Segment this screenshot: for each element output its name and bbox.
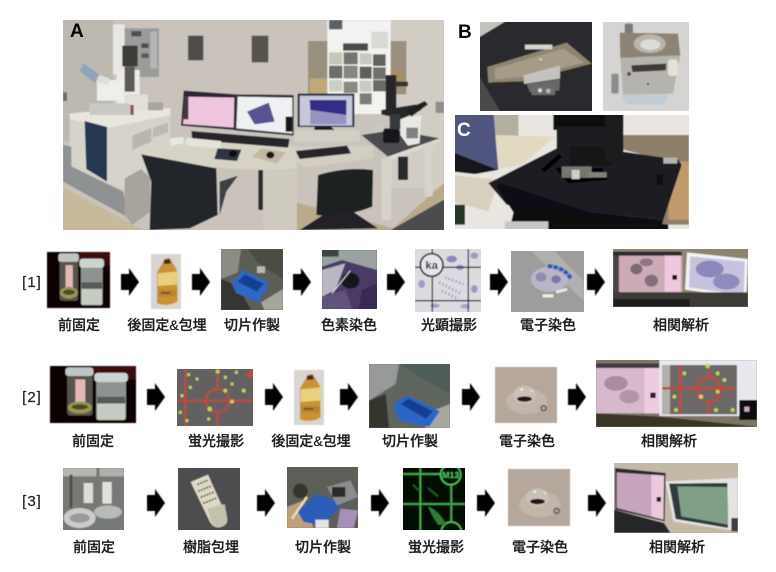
arrow — [265, 383, 283, 411]
step: 相関解析 — [611, 460, 741, 555]
monitor 3 — [298, 94, 354, 127]
step: 後固定&包埋 — [271, 370, 351, 449]
arrow — [490, 268, 508, 296]
row label [1]: [1] — [22, 274, 42, 291]
step: 相関解析: 相関解析 — [649, 539, 705, 555]
step: 電子染色: 電子染色 — [520, 317, 576, 333]
chairs — [141, 154, 218, 230]
step: 色素染色 — [319, 247, 380, 333]
step: 切片作製: 切片作製 — [382, 433, 438, 449]
poster — [327, 20, 391, 114]
arrow — [147, 383, 165, 411]
step: 電子染色 — [495, 367, 557, 449]
row 3 workflow — [22, 460, 741, 555]
photo: slide holder — [480, 22, 592, 111]
row 2 workflow — [22, 357, 760, 449]
step: 切片作製: 切片作製 — [224, 317, 280, 333]
step: 蛍光撮影: 蛍光撮影 — [188, 433, 244, 449]
step: 光顕撮影: 光顕撮影 — [421, 317, 477, 333]
step: 切片作製 — [218, 246, 286, 333]
step: 前固定 — [47, 252, 110, 333]
step: 電子染色: 電子染色 — [512, 539, 568, 555]
arrow — [568, 383, 586, 411]
photo: CLEM workstation room — [63, 20, 444, 230]
label B: B — [458, 22, 472, 43]
row label [2]: [2] — [22, 389, 42, 406]
label C: C — [457, 120, 471, 141]
arrow — [340, 383, 358, 411]
step: 光顕撮影 — [412, 246, 484, 333]
arrow — [293, 268, 311, 296]
step: 切片作製: 切片作製 — [295, 539, 351, 555]
step: 前固定 — [60, 465, 127, 555]
step: 切片作製 — [366, 361, 453, 449]
step: 相関解析 — [593, 357, 760, 449]
arrow — [121, 268, 139, 296]
step: 蛍光撮影 — [174, 366, 256, 449]
step: 色素染色: 色素染色 — [321, 317, 377, 333]
SEM column — [113, 24, 125, 74]
step: 後固定&包埋: 後固定&包埋 — [127, 317, 207, 333]
arrow — [147, 489, 165, 517]
step: 蛍光撮影: 蛍光撮影 — [408, 539, 464, 555]
arrow — [477, 489, 495, 517]
row 1 workflow — [22, 246, 751, 333]
arrow — [192, 268, 210, 296]
step: 前固定: 前固定 — [72, 433, 114, 449]
photo: grid holder — [603, 22, 689, 111]
step: 相関解析 — [610, 246, 751, 333]
arrow — [588, 489, 606, 517]
row label [3]: [3] — [22, 493, 42, 510]
arrow — [387, 268, 405, 296]
step: 切片作製 — [284, 464, 361, 555]
step: 電子染色: 電子染色 — [499, 433, 555, 449]
step: 相関解析: 相関解析 — [641, 433, 697, 449]
step: 蛍光撮影 — [400, 465, 468, 555]
photo: stage — [455, 115, 689, 229]
step: 後固定&包埋: 後固定&包埋 — [271, 433, 351, 449]
arrow — [462, 383, 480, 411]
step: 後固定&包埋 — [127, 254, 207, 333]
step: 電子染色 — [508, 469, 570, 555]
panel C: holder on microscope stage — [452, 112, 692, 235]
step: 樹脂包埋 — [175, 465, 243, 555]
step: 前固定: 前固定 — [58, 317, 100, 333]
step: 前固定 — [50, 366, 136, 449]
arrow — [257, 489, 275, 517]
wall prints — [188, 36, 203, 60]
monitor 1 — [181, 91, 236, 130]
label A: A — [70, 21, 84, 42]
step: 電子染色 — [508, 248, 587, 333]
step: 前固定: 前固定 — [73, 539, 115, 555]
shelf — [308, 41, 406, 94]
arrow — [587, 268, 605, 296]
SEM console — [70, 109, 170, 190]
arrow — [371, 489, 389, 517]
right table — [361, 130, 440, 157]
inverted microscope — [400, 115, 421, 146]
panel A: microscope room photo — [53, 8, 460, 242]
step: 相関解析: 相関解析 — [653, 317, 709, 333]
step: 蛍光撮影: M13 — [442, 470, 459, 480]
monitor 2 — [235, 94, 294, 136]
step: 樹脂包埋: 樹脂包埋 — [183, 539, 239, 555]
desk — [295, 130, 360, 142]
panel B: sample holders — [458, 19, 692, 114]
step: 光顕撮影: ka — [425, 260, 439, 272]
